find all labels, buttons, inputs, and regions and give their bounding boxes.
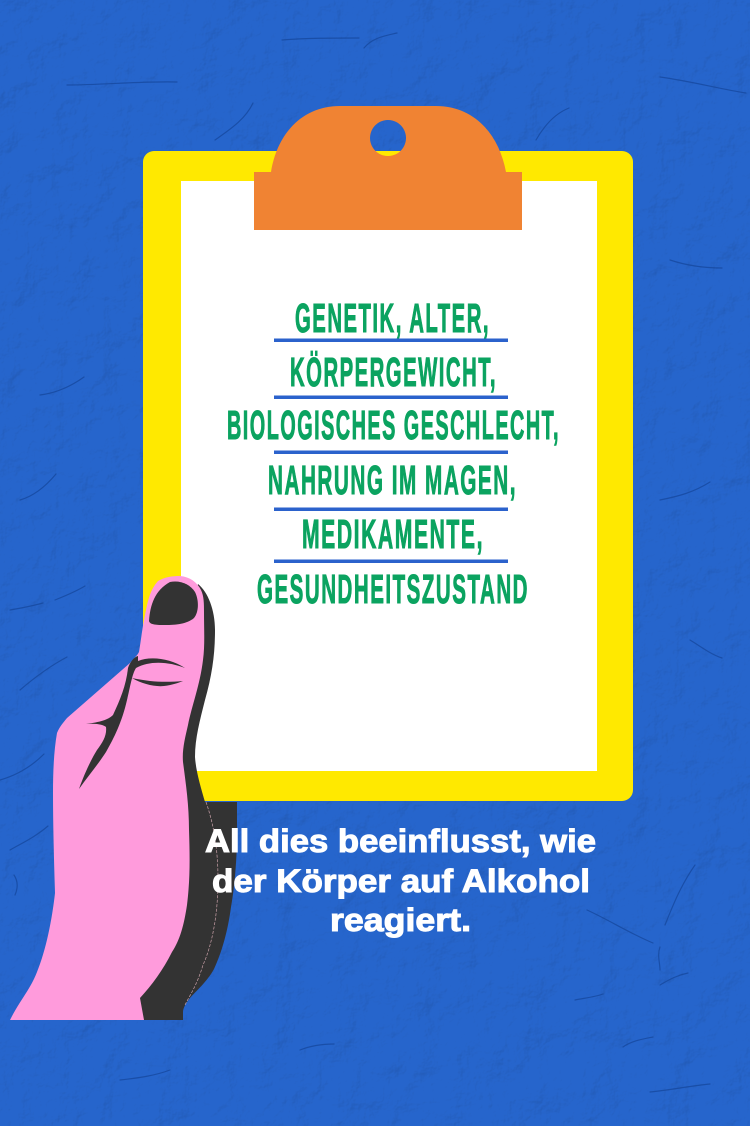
clipboard clip <box>254 106 522 230</box>
thumbnail <box>149 581 198 625</box>
dashed hand edge <box>185 802 218 1005</box>
item: Nahrung im Magen: NAHRUNG IM MAGEN, <box>268 457 517 503</box>
checklist text: KÖRPERGEWICHT, <box>290 349 497 395</box>
item: Medikamente: MEDIKAMENTE, <box>302 511 484 557</box>
checklist text <box>227 295 560 612</box>
caption <box>205 823 596 938</box>
caption: der Körper auf Alkohol <box>212 863 590 899</box>
caption: reagiert. <box>330 902 471 938</box>
caption: All dies beeinflusst, wie <box>205 823 596 859</box>
checklist text: GENETIK, ALTER, <box>295 295 490 341</box>
hand holding clipboard <box>10 576 237 1020</box>
clipboard board <box>143 151 633 801</box>
finger crease lines <box>79 656 185 789</box>
paper sheet <box>181 181 597 771</box>
thumb and palm <box>10 576 204 1020</box>
hand shadow <box>100 584 237 1020</box>
